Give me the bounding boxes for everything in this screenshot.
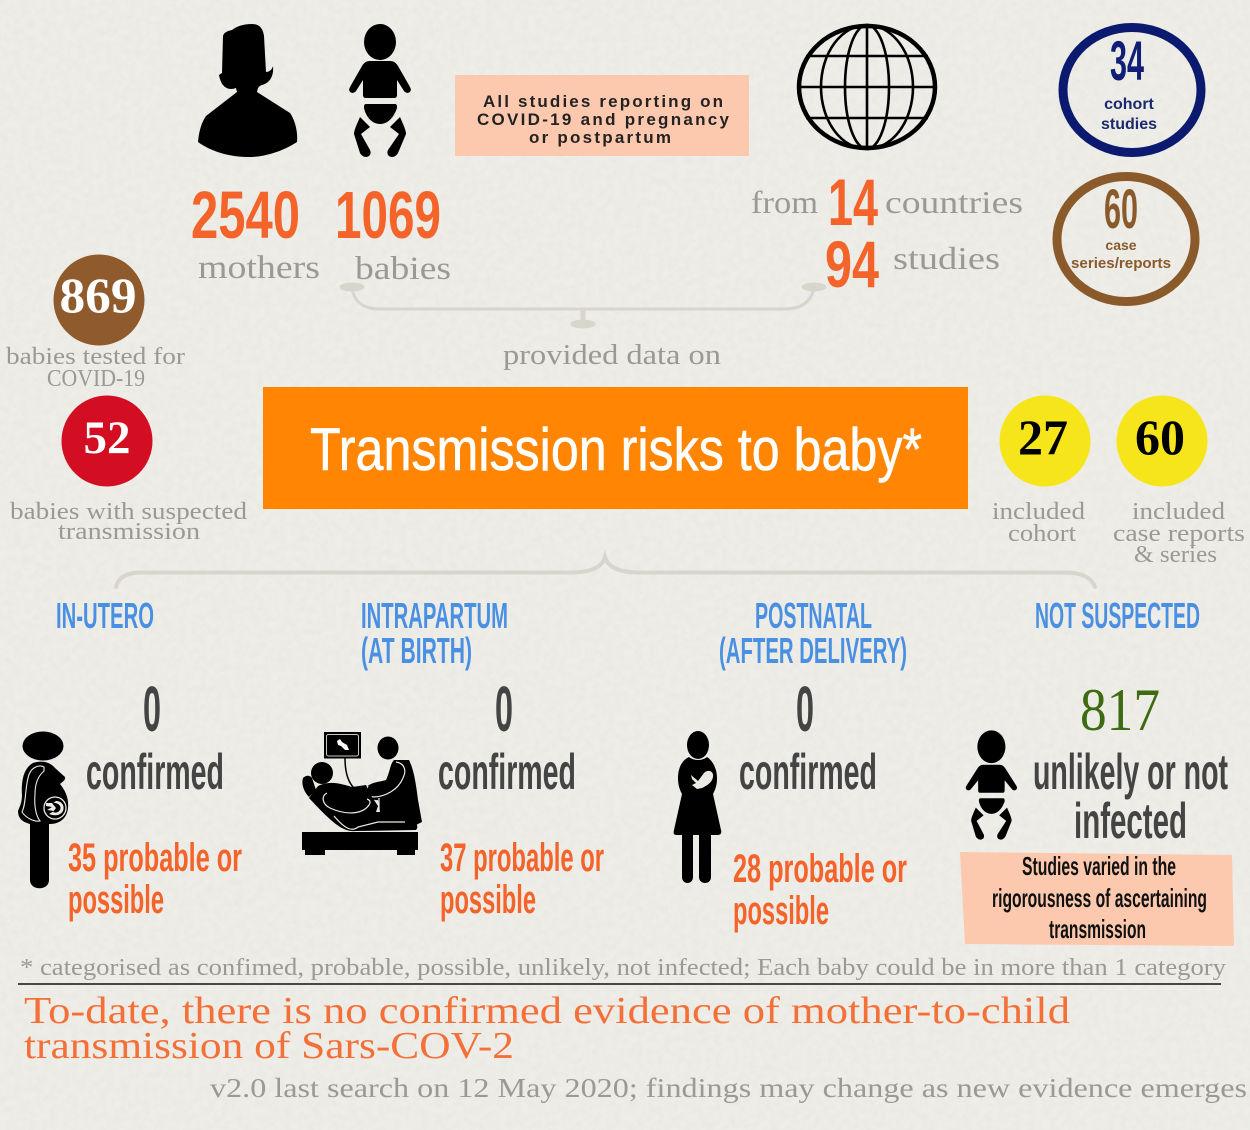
stat: 94 studies: studies (893, 240, 1000, 276)
stat: postnatal probable: possible (733, 889, 829, 933)
stat: from 14 countries (751, 165, 1023, 239)
callout: all studies: All studies reporting on (483, 92, 723, 111)
badge: 60 included case reports: 60 (1135, 409, 1185, 465)
stat: intrapartum probable: possible (440, 878, 536, 922)
arrow: bracket to provided data (340, 282, 826, 328)
stat: 1069 babies (335, 178, 451, 287)
badge: 869 babies tested: COVID-19 (47, 366, 145, 392)
stat: in-utero probable (68, 836, 242, 922)
callout: all studies (455, 75, 749, 156)
stat: in-utero confirmed (86, 673, 224, 800)
stat: in-utero confirmed: 0 (143, 673, 161, 745)
badge: 60 case series: 60 (1104, 177, 1138, 240)
badge: 52 suspected transmission: transmission (58, 519, 200, 545)
stat: in-utero probable: possible (68, 878, 164, 922)
stat: 94 studies (825, 227, 1000, 301)
stat: from 14 countries: from (751, 184, 818, 220)
icon: globe (799, 25, 935, 149)
stat: 2540 mothers: 2540 (191, 178, 300, 253)
icon: mother silhouette (198, 24, 297, 157)
badge: 60 included case reports: included (1132, 499, 1225, 525)
badge: 60 case series: series/reports (1071, 256, 1171, 272)
stat: intrapartum confirmed: confirmed (438, 744, 576, 800)
icon: mother holding baby (674, 731, 721, 883)
badge: 60 case series: case (1105, 237, 1137, 253)
badge: 60 case series (1057, 176, 1195, 302)
heading: intrapartum: INTRAPARTUM (361, 595, 508, 636)
badge: 27 included cohort: included (992, 499, 1085, 525)
stat: 817 unlikely or not infected (1033, 677, 1228, 849)
footnote: * categorised as confimed, probable, possible, unlikely, not infected; Each baby could be in more than 1 category (20, 955, 1226, 981)
icon: baby not infected (966, 730, 1017, 840)
badge: 60 included case reports (1113, 396, 1245, 568)
version note: v2.0 last search on 12 May 2020; findings may change as new evidence emerges (210, 1073, 1247, 1103)
heading: intrapartum (361, 595, 508, 671)
heading banner: transmission risks: Transmission risks to baby* (310, 416, 922, 483)
heading banner: transmission risks (263, 387, 968, 509)
conclusion text: transmission of Sars-COV-2 (24, 1025, 514, 1067)
stat: 2540 mothers (191, 178, 320, 286)
stat: postnatal probable (733, 847, 907, 933)
badge: 34 cohort studies: cohort (1104, 96, 1155, 113)
stat: in-utero probable: 35 probable or (68, 836, 242, 880)
stat: postnatal confirmed: confirmed (739, 744, 877, 800)
stat: intrapartum probable: 37 probable or (440, 836, 604, 880)
stat: 1069 babies: babies (355, 251, 451, 287)
text: provided data on: provided data on (503, 340, 721, 371)
badge: 27 included cohort: cohort (1008, 521, 1076, 547)
stat: 1069 babies: 1069 (335, 178, 441, 253)
heading: in-utero: IN-UTERO (56, 595, 154, 636)
heading: intrapartum: (AT BIRTH) (361, 630, 472, 671)
badge: 869 babies tested: babies tested for (6, 344, 185, 370)
stat: intrapartum confirmed (438, 673, 576, 800)
icon: baby (349, 24, 411, 157)
stat: 2540 mothers: mothers (198, 250, 320, 286)
heading: postnatal: (AFTER DELIVERY) (719, 630, 907, 671)
stat: postnatal probable: 28 probable or (733, 847, 907, 891)
icon: birth scene with ultrasound (302, 732, 422, 855)
callout: all studies: or postpartum (529, 128, 671, 147)
stat: postnatal confirmed: 0 (796, 673, 814, 745)
badge: 34 cohort studies (1063, 28, 1201, 152)
heading: postnatal (719, 595, 907, 671)
badge: 27 included cohort (992, 396, 1090, 547)
callout: studies varied (960, 851, 1234, 946)
stat: in-utero confirmed: confirmed (86, 744, 224, 800)
badge: 34 cohort studies: studies (1101, 116, 1157, 133)
stat: 94 studies: 94 (825, 227, 879, 301)
badge: 27 included cohort: 27 (1018, 409, 1068, 465)
callout: all studies: COVID-19 and pregnancy (477, 110, 730, 129)
stat: intrapartum confirmed: 0 (495, 673, 513, 745)
badge: 52 suspected transmission: 52 (84, 412, 130, 464)
badge: 34 cohort studies: 34 (1110, 29, 1144, 92)
icon: pregnant woman (18, 732, 68, 888)
badge: 60 included case reports: & series (1134, 542, 1217, 568)
stat: postnatal confirmed (739, 673, 877, 800)
heading: postnatal: POSTNATAL (755, 595, 872, 636)
badge: 869 babies tested (6, 254, 185, 392)
conclusion text (24, 990, 1070, 1067)
badge: 52 suspected transmission (10, 396, 247, 545)
badge: 869 babies tested: 869 (60, 267, 136, 323)
callout: studies varied: transmission (1049, 914, 1146, 944)
conclusion text: To-date, there is no confirmed evidence of mother-to-child (24, 990, 1070, 1032)
stat: from 14 countries: countries (885, 184, 1023, 220)
stat: intrapartum probable (440, 836, 604, 922)
badge: 52 suspected transmission: babies with suspected (10, 499, 247, 525)
stat: 817 unlikely or not infected: 817 (1080, 677, 1160, 743)
stat: from 14 countries: 14 (828, 165, 878, 239)
badge: 60 included case reports: case reports (1113, 521, 1245, 547)
arrow: bracket to categories (116, 557, 1095, 587)
